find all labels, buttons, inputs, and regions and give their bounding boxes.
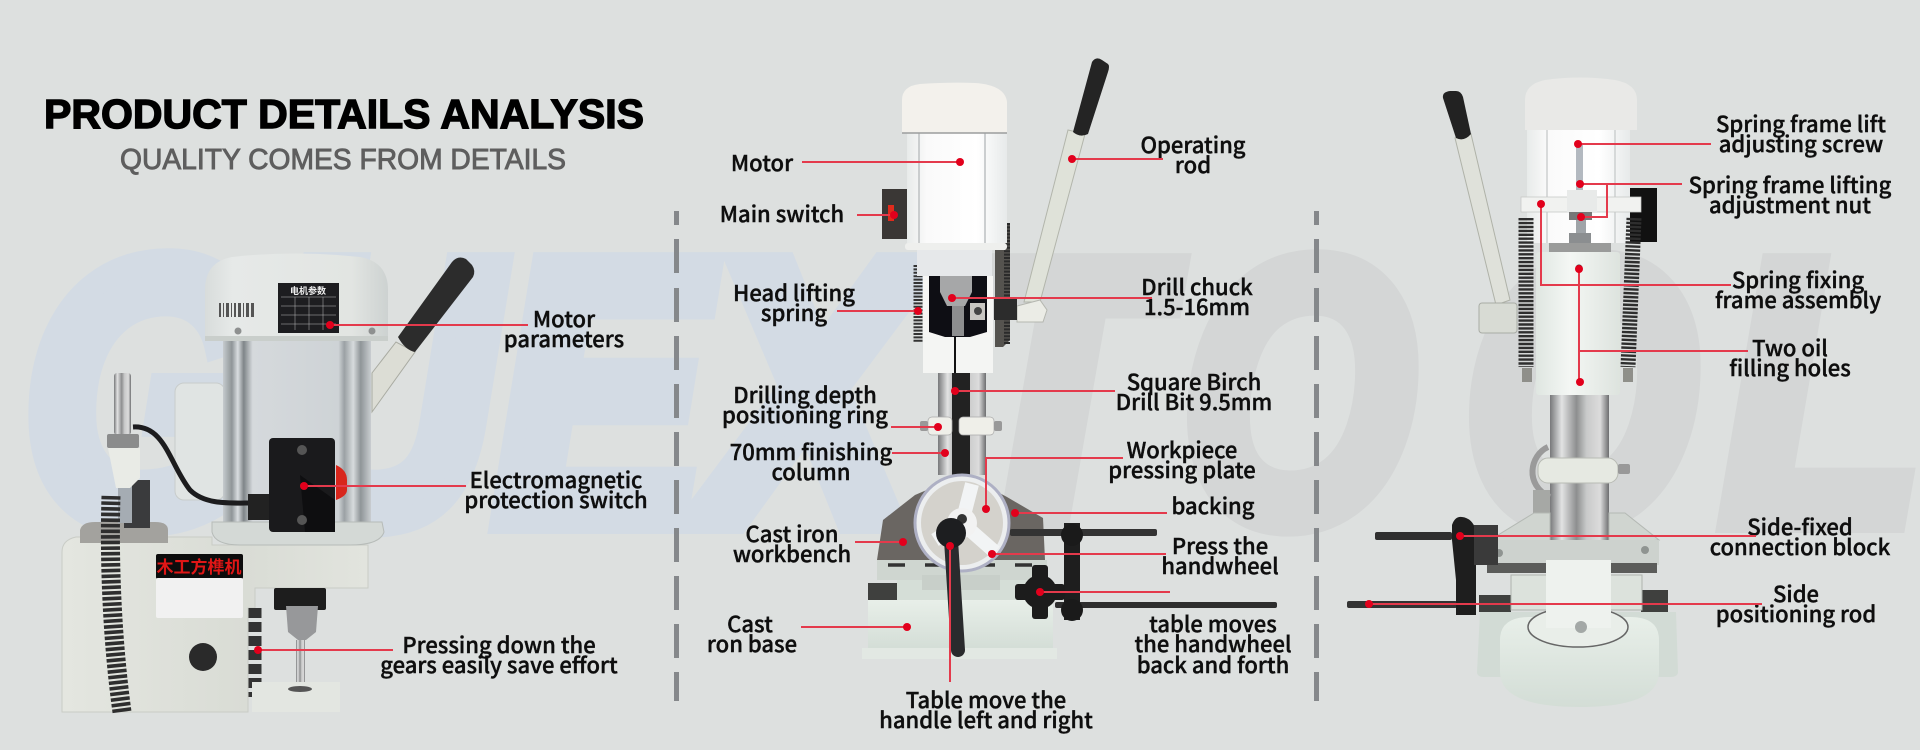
panel: right machine side view: [1347, 78, 1678, 707]
label: head lifting spring: spring: [761, 296, 827, 328]
spindle flange: [80, 522, 168, 543]
red rocker: [336, 465, 347, 500]
label: operating rod: rod: [1175, 148, 1211, 180]
chuck housing: [274, 588, 326, 610]
column: [938, 373, 986, 475]
label: drill chuck: [948, 270, 1253, 322]
label: spring frame lifting adjustment nut: adjustment nut: [1709, 188, 1871, 220]
black bracket: [1064, 523, 1080, 620]
column ring: [1538, 458, 1630, 483]
table gussets: [1485, 513, 1550, 545]
label text: 木工方榫机: [156, 553, 242, 578]
label: main switch: [720, 197, 898, 229]
black spindle window: [929, 276, 987, 337]
base: [868, 600, 1053, 650]
dashed dividers: [674, 211, 1319, 701]
adjusting screw: [1576, 145, 1583, 190]
label: spring frame lift adjusting screw: [1574, 107, 1886, 159]
motor cap: [902, 83, 1007, 133]
round knob: [189, 643, 217, 671]
label: square birch drill bit: Drill Bit 9.5mm: [1116, 385, 1272, 417]
label: spring frame lifting adjustment nut: [1576, 168, 1892, 221]
label: motor parameters: parameters: [504, 322, 624, 354]
depth ring: [920, 417, 1002, 435]
label: motor parameters: Motor: [533, 302, 596, 334]
label: drilling depth positioning ring: positioning ring: [722, 398, 888, 430]
label: cast iron workbench: Cast iron: [746, 517, 838, 549]
motor cap: [1525, 78, 1637, 130]
label: pressing down the gears: [254, 628, 618, 680]
label: cast iron base: [707, 607, 911, 659]
white label: [156, 578, 243, 618]
main switch box: [882, 189, 908, 239]
motor flange: [905, 243, 1007, 250]
label: table move handle: handle left and right: [879, 703, 1093, 735]
label: spring fixing frame assembly: Spring fixing: [1732, 263, 1864, 295]
label: side positioning rod: Side: [1773, 577, 1819, 609]
label: cast iron base: Cast: [727, 607, 773, 639]
drill chuck: [940, 276, 972, 306]
handwheel edge: [1532, 447, 1550, 497]
upper rod: [1010, 529, 1157, 536]
label: two oil filling holes: [1575, 265, 1851, 386]
left spring: [1518, 218, 1534, 367]
label: side positioning rod: [1365, 577, 1876, 629]
watermark: TOOL: O: [1464, 184, 1696, 600]
lower white head: [923, 337, 993, 373]
label: motor: Motor: [731, 146, 794, 178]
dark rails: [1479, 595, 1511, 612]
motor base flange: [212, 522, 384, 545]
oil holes: [1576, 264, 1582, 272]
label: electromagnetic protection switch: Electromagnetic: [470, 463, 642, 495]
lower rod: [1055, 602, 1277, 608]
watermark: TOOL: O: [1182, 184, 1414, 600]
housing: [1536, 252, 1620, 395]
label: operating rod: [1068, 128, 1246, 180]
white clamp: [108, 448, 140, 488]
label: press the handwheel: [988, 529, 1279, 581]
label: table moves the handwheel back and forth: [1036, 588, 1292, 680]
label: backing: [1011, 489, 1255, 521]
feet: [1477, 612, 1678, 677]
label: spring fixing frame assembly: [1537, 200, 1881, 315]
chuck: [286, 606, 318, 640]
slide table: [877, 560, 1047, 580]
column: [1550, 395, 1609, 565]
label: pressing down the gears: gears easily save effort: [380, 648, 618, 680]
label: square birch drill bit: Square Birch: [1127, 365, 1261, 397]
label: cast iron workbench: [733, 517, 907, 569]
center block: [922, 575, 1000, 590]
label: backing: backing: [1172, 489, 1255, 521]
base top: [897, 580, 1027, 602]
title: PRODUCT DETAILS ANALYSIS: [44, 91, 644, 137]
switch box: [1629, 188, 1657, 242]
label: side-fixed connection block: connection block: [1710, 530, 1891, 562]
right spring plate: [995, 223, 1010, 347]
label: motor: [731, 146, 964, 178]
metal ring: [1549, 243, 1611, 252]
motor body: [1527, 130, 1630, 243]
return spring: [110, 496, 122, 712]
label: electromagnetic protection switch: protection switch: [464, 483, 648, 515]
label: table moves the handwheel back and forth: back and forth: [1137, 648, 1289, 680]
barcode: [219, 303, 254, 317]
operating rod: [1024, 130, 1085, 302]
label: table move handle: [879, 542, 1093, 735]
capacitor box: [175, 383, 225, 500]
motor parameter plate: 电机参数: [290, 284, 326, 297]
black bracket: [1452, 517, 1476, 615]
label: two oil filling holes: filling holes: [1729, 351, 1851, 383]
label: main switch: Main switch: [720, 197, 844, 229]
bolts: [234, 328, 242, 334]
left spring: [914, 265, 922, 343]
panel: left close-up machine: [62, 254, 474, 712]
rail block: [868, 583, 897, 600]
spring frame bar: [1521, 190, 1641, 213]
label: 70mm finishing column: 70mm finishing: [730, 435, 893, 467]
label: pressing down the gears: Pressing down the: [402, 628, 596, 660]
subtitle: QUALITY COMES FROM DETAILS: [120, 144, 566, 176]
lower housing column: [1546, 560, 1611, 628]
lower rod: [1347, 601, 1457, 608]
label: cast iron base: ron base: [707, 627, 797, 659]
label: 70mm finishing column: [730, 435, 949, 487]
operating handle: [372, 342, 415, 412]
panel: center machine front view: [862, 58, 1277, 659]
label: drill chuck: 1.5-16mm: [1144, 290, 1250, 322]
label: square birch drill bit: [951, 365, 1272, 417]
saddle blocks: [1511, 575, 1547, 610]
rear bracket: [1533, 490, 1550, 520]
label: table moves the handwheel back and forth: table moves: [1149, 607, 1277, 639]
drill slot: [952, 373, 970, 475]
cable: [133, 427, 252, 503]
base flange: [862, 648, 1057, 659]
motor cap: [205, 254, 388, 340]
operating rod: [1455, 134, 1510, 305]
table shadow: [1487, 563, 1657, 573]
black name label: [156, 554, 243, 579]
dark fitting: [124, 480, 150, 528]
watermark: GUEX: GUEX: [24, 184, 930, 600]
label: head lifting spring: [733, 276, 922, 328]
handwheel: [915, 475, 1009, 571]
label: side-fixed connection block: [1456, 510, 1891, 562]
motor body: [223, 340, 371, 530]
spring anchors: [1522, 368, 1633, 382]
handle base arm: [1017, 300, 1047, 322]
table: [1485, 540, 1659, 565]
adjusting nut and shaft: [1569, 212, 1592, 243]
table bolts: [1495, 549, 1503, 557]
label: workpiece pressing plate: [982, 433, 1256, 513]
label: drilling depth positioning ring: [722, 378, 942, 431]
base ring: [1528, 607, 1628, 647]
label: spring frame lifting adjustment nut: Spring frame lifting: [1689, 168, 1892, 200]
handle base: [1479, 303, 1517, 333]
label: workpiece pressing plate: Workpiece: [1127, 433, 1237, 465]
spindle window frame: [923, 276, 993, 337]
label: operating rod: Operating: [1140, 128, 1246, 160]
label: table move handle: Table move the: [906, 683, 1066, 715]
gear rack: [248, 608, 262, 697]
right spring: [1628, 218, 1634, 367]
head block: [917, 250, 992, 276]
cast iron gusset: [877, 480, 1045, 560]
label: side positioning rod: positioning rod: [1716, 597, 1876, 629]
label: workpiece pressing plate: pressing plate: [1108, 453, 1256, 485]
rod grip: [1443, 91, 1471, 139]
label: two oil filling holes: Two oil: [1752, 331, 1828, 363]
label: head lifting spring: Head lifting: [733, 276, 855, 308]
handle dark block: [994, 298, 1017, 320]
steel fitting: [118, 478, 132, 523]
drill bit: [296, 640, 305, 688]
label: spring fixing frame assembly: frame assembly: [1715, 283, 1881, 315]
label: cast iron workbench: workbench: [733, 537, 851, 569]
label: side-fixed connection block: Side-fixed: [1747, 510, 1853, 542]
round base: [1500, 617, 1659, 707]
label: press the handwheel: Press the: [1172, 529, 1268, 561]
threaded bolt: [114, 373, 131, 435]
motor body: [907, 133, 1007, 243]
upper rod: [1375, 532, 1452, 540]
watermark: TOOL: [950, 184, 1920, 600]
switch box: [269, 438, 335, 532]
label: press the handwheel: handwheel: [1161, 549, 1279, 581]
table handle: [936, 518, 966, 650]
column body: [62, 537, 368, 712]
motor parameter plate: [278, 283, 339, 333]
nut: [107, 434, 139, 448]
label: 70mm finishing column: column: [771, 455, 851, 487]
label: electromagnetic protection switch: [300, 463, 648, 515]
label: spring frame lift adjusting screw: Spring frame lift: [1716, 107, 1886, 139]
label: drill chuck: Drill chuck: [1141, 270, 1253, 302]
handle grip: [398, 258, 474, 352]
table: [252, 682, 340, 712]
rod grip: [1073, 58, 1109, 136]
watermark: TOOL: T: [950, 184, 1181, 600]
label: table moves the handwheel back and forth: the handwheel: [1134, 627, 1292, 659]
label: drilling depth positioning ring: Drilling depth: [733, 378, 877, 410]
base bolt: [1575, 621, 1587, 633]
label: motor parameters: [326, 302, 624, 354]
star knob: [1015, 565, 1065, 619]
label: spring frame lift adjusting screw: adjusting screw: [1719, 127, 1883, 159]
